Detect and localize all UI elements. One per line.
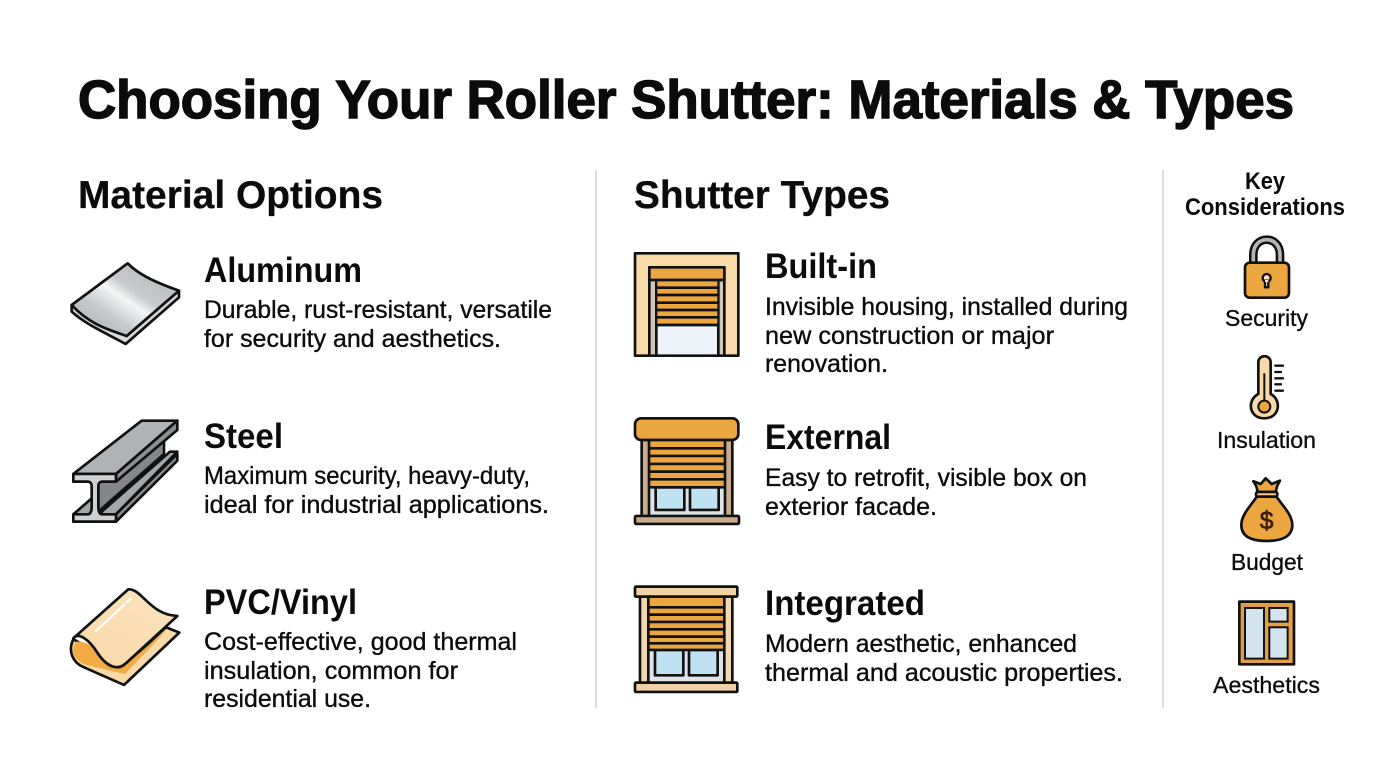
integrated description: Modern aesthetic, enhanced xyxy=(765,630,1077,658)
panel: material options xyxy=(71,174,552,713)
item: external xyxy=(635,418,1087,524)
icon: window xyxy=(1239,602,1294,664)
item: built-in xyxy=(635,247,1128,378)
icon: integrated shutter xyxy=(635,587,737,692)
external name: External xyxy=(765,418,891,457)
aluminum description xyxy=(204,296,552,353)
item: aluminum xyxy=(72,251,552,353)
heading: key considerations xyxy=(1185,168,1345,221)
pvc description: insulation, common for xyxy=(204,657,458,685)
item: steel xyxy=(73,417,549,522)
pvc description: residential use. xyxy=(204,685,371,713)
icon: pvc sheet xyxy=(71,589,179,685)
pvc description xyxy=(204,628,517,713)
insulation label: Insulation xyxy=(1217,427,1316,453)
heading: shutter types: Shutter Types xyxy=(634,174,890,217)
external description: exterior facade. xyxy=(765,493,937,521)
steel description xyxy=(204,462,549,519)
external description xyxy=(765,464,1087,521)
item: pvc/vinyl xyxy=(71,583,517,713)
integrated description xyxy=(765,630,1123,687)
icon: thermometer xyxy=(1251,356,1283,418)
heading: material options: Material Options xyxy=(78,174,383,217)
pvc description: Cost-effective, good thermal xyxy=(204,628,517,656)
steel description: ideal for industrial applications. xyxy=(204,491,549,519)
icon: money bag: $ xyxy=(1260,508,1274,535)
integrated name: Integrated xyxy=(765,584,925,623)
aluminum name: Aluminum xyxy=(204,251,362,290)
integrated description: thermal and acoustic properties. xyxy=(765,659,1123,687)
heading: key considerations: Considerations xyxy=(1185,194,1345,221)
steel description: Maximum security, heavy-duty, xyxy=(204,462,530,490)
icon: padlock xyxy=(1245,240,1289,298)
aesthetics label: Aesthetics xyxy=(1213,672,1320,698)
item: aesthetics xyxy=(1213,602,1320,698)
security label: Security xyxy=(1225,305,1308,331)
title: Choosing Your Roller Shutter: Materials & Types xyxy=(78,70,1294,130)
built-in description: new construction or major xyxy=(765,322,1054,350)
built-in description: renovation. xyxy=(765,350,888,378)
panel: key considerations xyxy=(1185,168,1345,698)
built-in name: Built-in xyxy=(765,247,877,286)
item: insulation xyxy=(1217,356,1316,453)
built-in description: Invisible housing, installed during xyxy=(765,293,1128,321)
external description: Easy to retrofit, visible box on xyxy=(765,464,1087,492)
pvc name: PVC/Vinyl xyxy=(204,583,357,622)
budget label: Budget xyxy=(1231,549,1304,575)
item: integrated xyxy=(635,584,1123,692)
icon: steel i-beam xyxy=(73,421,177,522)
icon: external shutter xyxy=(635,418,739,524)
steel name: Steel xyxy=(204,417,283,456)
icon: aluminum sheet xyxy=(72,263,179,344)
built-in description xyxy=(765,293,1128,378)
aluminum description: for security and aesthetics. xyxy=(204,325,501,353)
heading: key considerations: Key xyxy=(1245,168,1286,195)
aluminum description: Durable, rust-resistant, versatile xyxy=(204,296,552,324)
panel: shutter types xyxy=(634,174,1128,692)
item: security xyxy=(1225,240,1308,331)
item: budget xyxy=(1231,478,1304,575)
icon: built-in shutter xyxy=(635,253,738,356)
